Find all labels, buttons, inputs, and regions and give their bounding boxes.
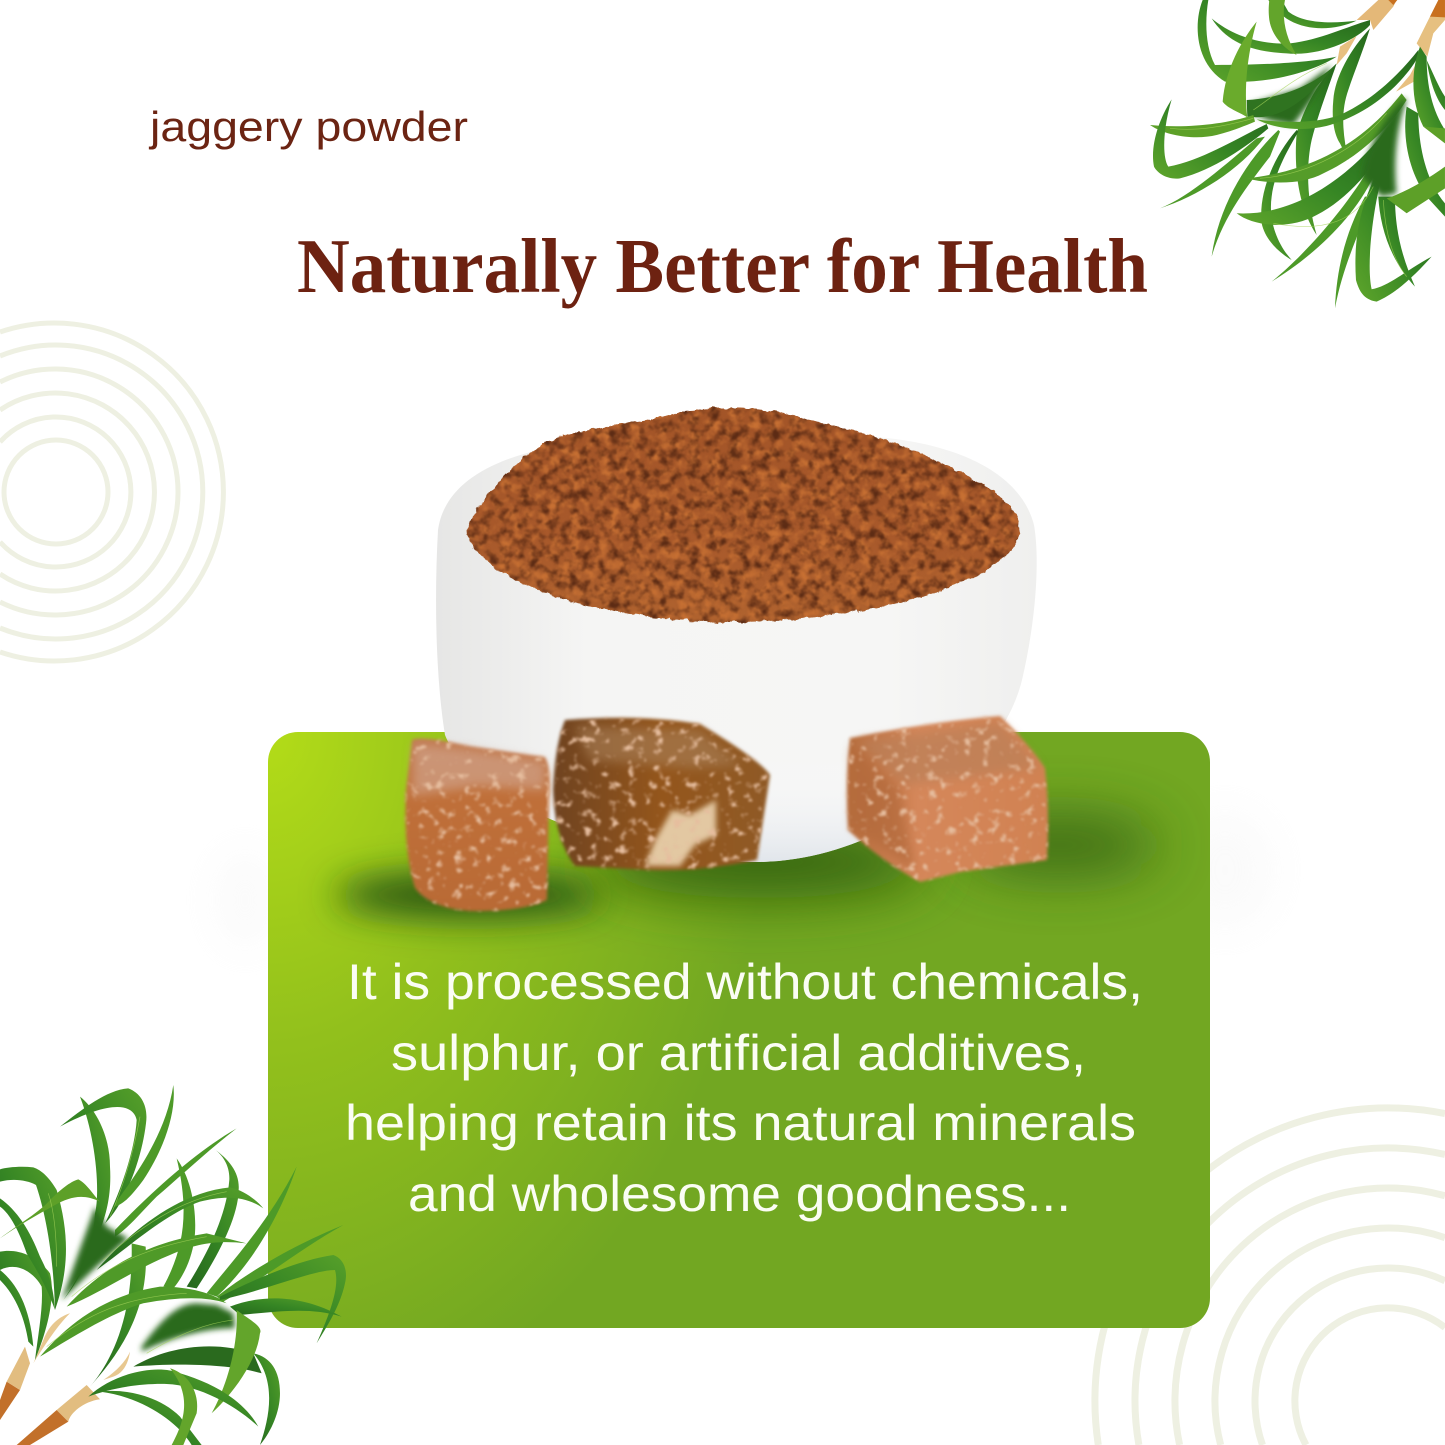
decorative concentric rings bottom right <box>1095 1108 1445 1445</box>
faint glow around panel <box>215 810 1275 950</box>
powder mound <box>466 408 1019 622</box>
description text <box>345 954 1143 1222</box>
description text: It is processed without chemicals, <box>347 954 1143 1010</box>
jaggery cube right <box>847 716 1048 882</box>
description text: sulphur, or artificial additives, <box>391 1025 1086 1081</box>
icon: sugarcane leaves top right <box>1150 0 1445 308</box>
jaggery cube middle <box>553 718 770 870</box>
jaggery cube left <box>405 738 550 911</box>
icon: sugarcane leaves bottom left <box>0 1085 346 1445</box>
decorative concentric rings left <box>0 323 223 661</box>
bowl <box>436 436 1037 862</box>
description text: and wholesome goodness... <box>408 1166 1071 1222</box>
brand label: jaggery powder <box>148 103 468 150</box>
product photo: bowl of jaggery powder <box>436 408 1037 862</box>
title: Naturally Better for Health <box>297 223 1148 309</box>
description text: helping retain its natural minerals <box>345 1095 1136 1151</box>
panel: green description card <box>268 732 1210 1328</box>
ground shadows <box>335 815 1160 917</box>
